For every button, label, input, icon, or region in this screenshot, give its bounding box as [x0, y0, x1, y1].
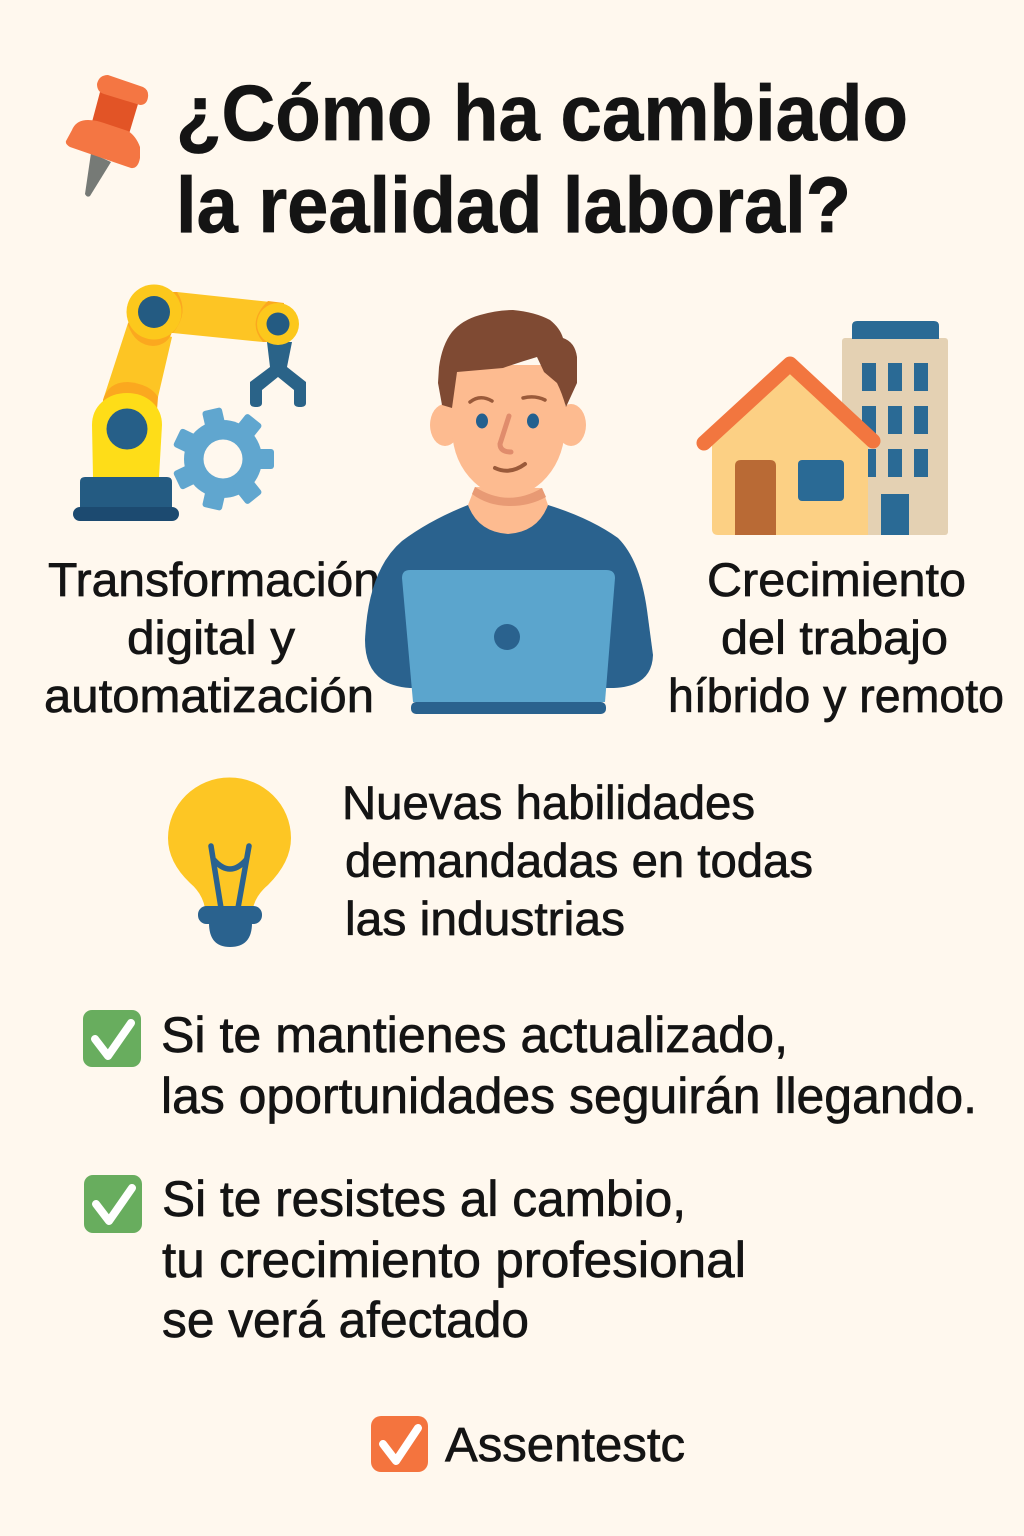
nose and mouth [500, 416, 511, 452]
text: hybrid and remote work: Crecimiento [707, 553, 966, 606]
text: stay updated: las oportunidades seguirán llegando. [161, 1068, 977, 1124]
text: resist change: se verá afectado [162, 1292, 529, 1348]
icon: light bulb [168, 778, 291, 947]
illustration: person with laptop [365, 310, 653, 714]
text: digital transformation: automatización [44, 669, 374, 722]
ears [430, 404, 460, 446]
text: hybrid and remote work: del trabajo [721, 611, 948, 664]
title [176, 68, 908, 249]
neck [468, 487, 548, 534]
body [365, 505, 653, 688]
text: brand name: Assentestc [445, 1419, 685, 1472]
text: resist change: Si te resistes al cambio, [162, 1171, 686, 1227]
house [712, 372, 868, 535]
text: digital transformation: digital y [127, 611, 296, 664]
building [842, 338, 948, 535]
icon: green check 1 [83, 1010, 141, 1067]
text: new skills: Nuevas habilidades [342, 776, 755, 829]
text: new skills [342, 776, 813, 945]
gripper [250, 342, 306, 407]
icon: green check 2 [84, 1175, 142, 1233]
icon: orange check [371, 1416, 428, 1472]
text: new skills: demandadas en todas [345, 834, 813, 887]
text: resist change [162, 1171, 746, 1348]
forearm [173, 292, 280, 342]
robot base [80, 477, 172, 508]
text: new skills: las industrias [345, 892, 625, 945]
icon: robot arm with gear [73, 284, 306, 521]
text: stay updated: Si te mantienes actualizado, [161, 1007, 788, 1063]
text: digital transformation [44, 553, 380, 722]
icon: house and office building [704, 321, 948, 535]
icon: push pin [66, 75, 148, 197]
laptop [402, 570, 615, 702]
title: la realidad laboral? [176, 160, 851, 249]
text: digital transformation: Transformación [48, 553, 380, 606]
text: resist change: tu crecimiento profesional [162, 1232, 746, 1288]
text: hybrid and remote work [668, 553, 1004, 722]
text: stay updated [161, 1007, 977, 1124]
hair [438, 310, 577, 408]
robot body [92, 393, 162, 477]
shoulder joint [126, 284, 182, 340]
text: hybrid and remote work: híbrido y remoto [668, 669, 1004, 722]
elbow joint [257, 303, 299, 345]
upper arm [103, 323, 172, 400]
gear [173, 407, 274, 511]
title: ¿Cómo ha cambiado [176, 68, 908, 157]
eyes and brows [476, 414, 488, 428]
face [452, 365, 565, 497]
